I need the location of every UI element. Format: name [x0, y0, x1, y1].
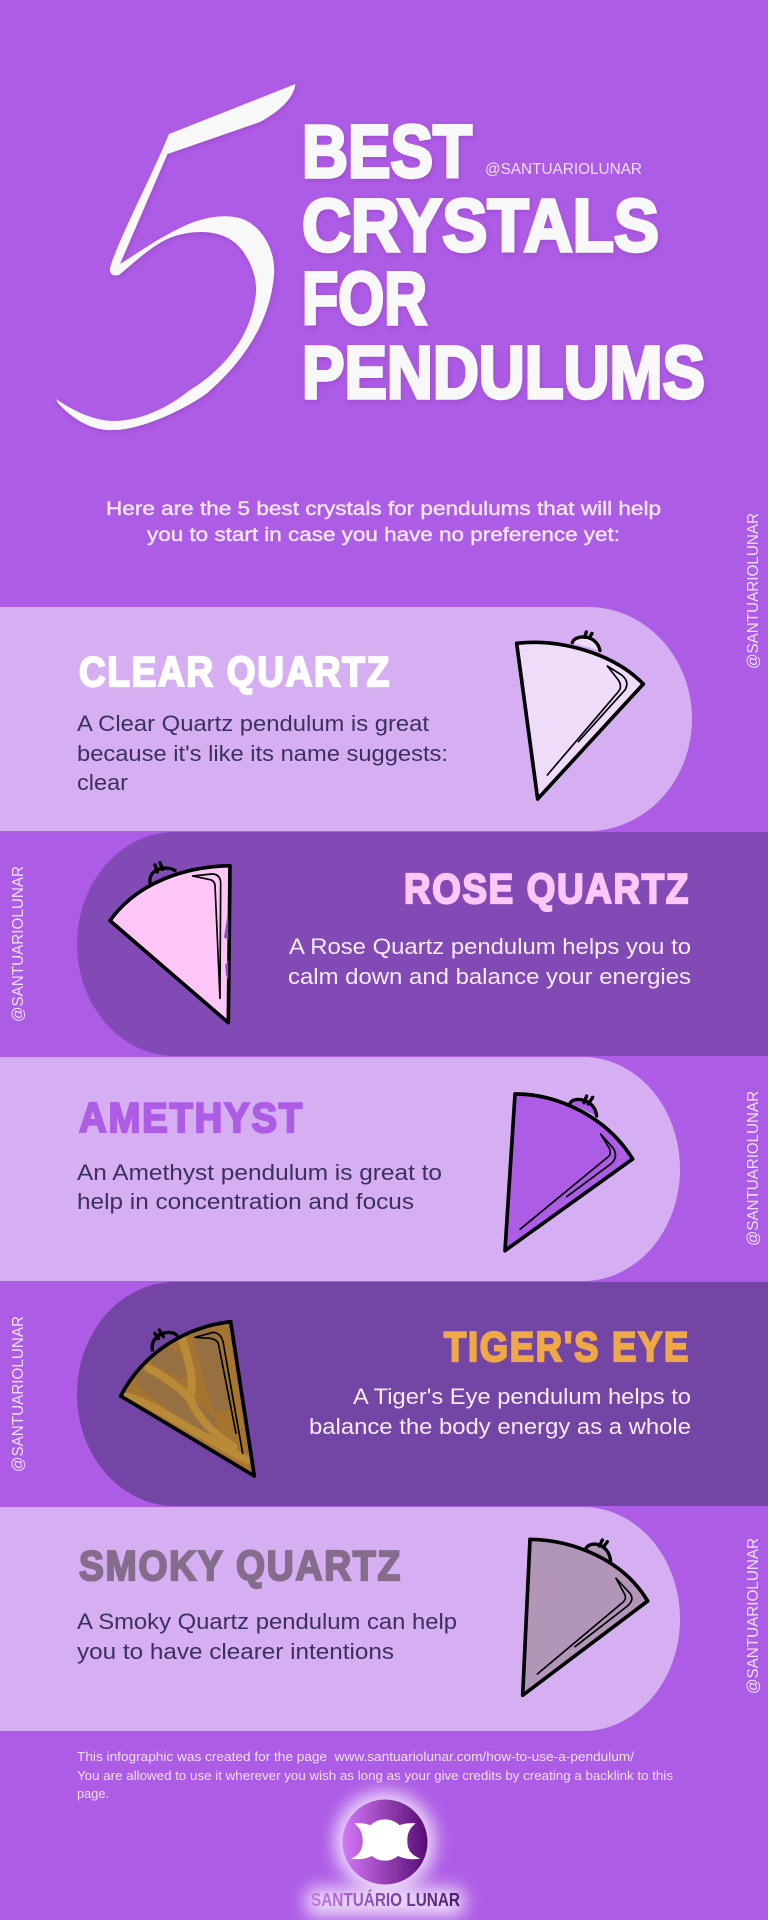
heading: tiger's eye: TIGER'S EYE [444, 1323, 690, 1370]
text: amethyst description [77, 1160, 442, 1214]
text: rose quartz description: A Rose Quartz pendulum helps you to [289, 934, 691, 959]
panel: rose quartz [77, 832, 768, 1056]
vertical watermark right 2: @SANTUARIOLUNAR [745, 1091, 762, 1246]
text: smoky quartz description: A Smoky Quartz pendulum can help [77, 1609, 457, 1634]
text: clear quartz description: because it's like its name suggests: [77, 741, 448, 766]
footer credit text: You are allowed to use it wherever you wish as long as your give credits by creating a backlink to this [77, 1769, 673, 1783]
watermark handle: @SANTUARIOLUNAR [485, 161, 642, 178]
icon: clear quartz pendulum [517, 632, 643, 799]
panel: clear quartz [0, 607, 692, 831]
icon: triple moon [351, 1819, 421, 1861]
title: FOR [302, 257, 427, 340]
heading: clear quartz: CLEAR QUARTZ [79, 648, 391, 695]
title [302, 110, 705, 414]
footer credit text: page. [77, 1787, 109, 1801]
text: amethyst description: An Amethyst pendulum is great to [77, 1160, 442, 1185]
intro text: Here are the 5 best crystals for pendulums that will help [106, 499, 661, 520]
title: CRYSTALS [302, 184, 659, 267]
title: BEST [302, 110, 472, 193]
panel: tiger's eye [77, 1282, 768, 1506]
vertical watermark left 2: @SANTUARIOLUNAR [10, 1316, 27, 1472]
footer credit text [77, 1750, 673, 1801]
heading: amethyst: AMETHYST [79, 1094, 304, 1141]
text: clear quartz description: clear [77, 770, 128, 795]
heading: smoky quartz: SMOKY QUARTZ [79, 1542, 402, 1589]
icon: smoky quartz pendulum [523, 1539, 648, 1695]
vertical watermark right 3: @SANTUARIOLUNAR [745, 1538, 762, 1694]
intro text: you to start in case you have no preference yet: [147, 525, 620, 546]
icon: amethyst pendulum [505, 1094, 633, 1251]
text: clear quartz description: A Clear Quartz pendulum is great [77, 711, 429, 736]
text: tiger's eye description: A Tiger's Eye pendulum helps to [353, 1384, 691, 1409]
text: tiger's eye description [309, 1384, 691, 1439]
logo: santuario lunar [306, 1792, 464, 1916]
intro text [106, 499, 661, 546]
heading: rose quartz: ROSE QUARTZ [404, 865, 690, 912]
icon: tiger's eye pendulum [121, 1322, 254, 1476]
vertical watermark right 1: @SANTUARIOLUNAR [745, 513, 762, 669]
footer credit text: This infographic was created for the page www.santuariolunar.com/how-to-use-a-pendulum/ [77, 1750, 635, 1764]
text: rose quartz description: calm down and balance your energies [288, 964, 691, 989]
title: PENDULUMS [302, 331, 705, 414]
text: smoky quartz description [77, 1609, 457, 1664]
panel: amethyst [0, 1057, 680, 1281]
logo wordmark: SANTUÁRIO LUNAR [311, 1889, 460, 1910]
text: smoky quartz description: you to have clearer intentions [77, 1639, 394, 1664]
big numeral 5 [56, 84, 296, 430]
text: amethyst description: help in concentration and focus [77, 1189, 414, 1214]
icon: rose quartz pendulum [110, 863, 230, 1023]
panel: smoky quartz [0, 1507, 680, 1731]
text: clear quartz description [77, 711, 448, 795]
text: rose quartz description [288, 934, 691, 989]
text: tiger's eye description: balance the body energy as a whole [309, 1414, 691, 1439]
vertical watermark left 1: @SANTUARIOLUNAR [10, 866, 27, 1022]
